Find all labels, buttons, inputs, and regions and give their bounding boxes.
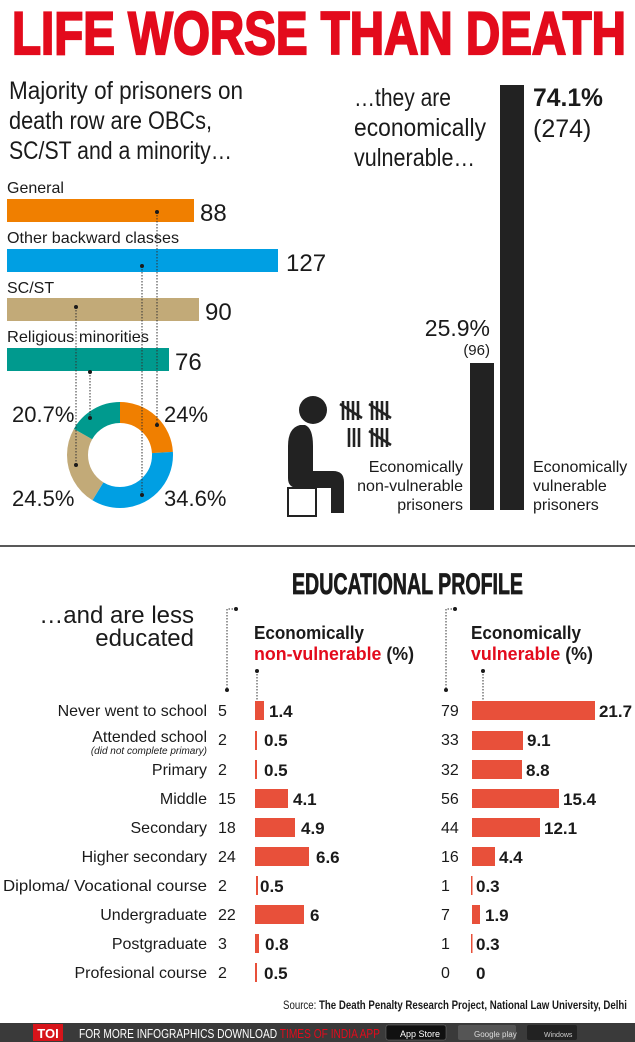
bar chart: vulnerable education: 21.7 [599,702,632,721]
row labels: Postgraduate [112,936,207,953]
bar chart: non-vulnerable education: 0.5 [264,964,288,983]
bar chart: economic vulnerability: vulnerable [533,478,607,495]
row labels: Diploma/ Vocational course [3,878,207,895]
bar chart: caste categories: 127 [286,250,326,277]
intro text: majority: death row are OBCs, [9,107,212,135]
bar chart: economic vulnerability: Economically [533,459,627,476]
bar chart: non-vulnerable education: 0.5 [260,877,284,896]
bar chart: non-vulnerable education: 5 [218,703,227,720]
bar chart: economic vulnerability: non-vulnerable [357,478,463,495]
donut chart: 20.7% [12,402,74,427]
bar chart: caste categories: 90 [205,299,232,326]
intro text: economically vulnerable [354,84,486,172]
bar chart: vulnerable education: 4.4 [499,848,523,867]
bar chart: caste categories: 76 [175,349,202,376]
bar chart: non-vulnerable education: 3 [218,936,227,953]
donut chart [12,402,226,511]
row labels: Middle [160,791,207,808]
column headings: Economically [471,623,581,643]
bar chart: non-vulnerable education: 6 [310,906,319,925]
bar chart: economic vulnerability: prisoners [397,497,463,514]
intro text: economically vulnerable: economically [354,114,486,142]
bar chart: non-vulnerable education: 22 [218,907,236,924]
bar chart: non-vulnerable education: 18 [218,820,236,837]
donut chart: 34.6% [164,486,226,511]
intro text: majority: Majority of prisoners on [9,77,243,105]
bar chart: vulnerable education: 0.3 [476,877,500,896]
bar chart: non-vulnerable education: 0.5 [264,761,288,780]
bar chart: vulnerable education: 0 [476,964,485,983]
bar chart: economic vulnerability: 25.9% [425,315,490,341]
bar chart: non-vulnerable education: 0.5 [264,731,288,750]
bar chart: economic vulnerability: prisoners [533,497,599,514]
bar chart: vulnerable education: 1.9 [485,906,509,925]
footer bar: Google play [474,1030,517,1039]
intro text: majority: SC/ST and a minority… [9,137,232,165]
column headings: vulnerable (%) [471,644,593,664]
column headings: non-vulnerable (%) [254,644,414,664]
bar chart: vulnerable education: 33 [441,732,459,749]
footer bar: Windows [544,1032,573,1039]
bar chart: caste categories: General [7,180,64,197]
bar chart: economic vulnerability: Economically [369,459,463,476]
bar chart: non-vulnerable education: 2 [218,878,227,895]
icon: tally marks [340,401,391,447]
bar chart: caste categories: 88 [200,200,227,227]
bar chart: vulnerable education: 16 [441,849,459,866]
intro text: majority [9,77,243,165]
bar chart: vulnerable education: 1 [441,936,450,953]
bar chart: non-vulnerable education [218,701,340,983]
column headings [254,623,593,664]
footer bar: FOR MORE INFOGRAPHICS DOWNLOAD TIMES OF INDIA APP [79,1026,380,1041]
row labels: Higher secondary [82,849,207,866]
bar chart: economic vulnerability: (274) [533,115,591,143]
bar chart: caste categories: Religious minorities [7,329,149,346]
bar chart: non-vulnerable education: 6.6 [316,848,340,867]
bar chart: non-vulnerable education: 4.9 [301,819,325,838]
bar chart: caste categories: SC/ST [7,280,54,297]
bar chart: vulnerable education: 1 [441,878,450,895]
bar chart: vulnerable education [441,701,632,983]
intro text: economically vulnerable: vulnerable… [354,144,475,172]
bar chart: vulnerable education: 15.4 [563,790,597,809]
bar chart: caste categories [7,180,326,376]
bar chart: economic vulnerability [357,84,627,514]
bar chart: vulnerable education: 32 [441,762,459,779]
bar chart: economic vulnerability: (96) [463,342,490,359]
bar chart: economic vulnerability: 74.1% [533,84,603,112]
text: less educated: educated [95,625,194,652]
connector dotted lines [74,210,159,497]
footer bar: TOI [37,1026,59,1041]
bar chart: vulnerable education: 79 [441,703,459,720]
donut chart: 24% [164,402,208,427]
row labels: (did not complete primary) [91,746,207,757]
bar chart: non-vulnerable education: 15 [218,791,236,808]
bar chart: non-vulnerable education: 2 [218,762,227,779]
bar chart: vulnerable education: 9.1 [527,731,551,750]
row labels: Profesional course [74,965,207,982]
bar chart: non-vulnerable education: 0.8 [265,935,289,954]
footer bar: App Store [400,1029,440,1039]
bar chart: vulnerable education: 8.8 [526,761,550,780]
bar chart: non-vulnerable education: 2 [218,732,227,749]
row labels: Never went to school [58,703,207,720]
bar chart: caste categories: Other backward classes [7,230,179,247]
bar chart: vulnerable education: 56 [441,791,459,808]
donut chart: 24.5% [12,486,74,511]
intro text: economically vulnerable: …they are [354,84,451,112]
icon: seated prisoner [288,396,344,516]
text: less educated [39,602,194,652]
bar chart: non-vulnerable education: 24 [218,849,236,866]
bar chart: non-vulnerable education: 2 [218,965,227,982]
text: less educated: …and are less [39,602,194,629]
footer bar [0,1023,635,1042]
bar chart: non-vulnerable education: 1.4 [269,702,293,721]
bar chart: vulnerable education: 7 [441,907,450,924]
bar chart: vulnerable education: 44 [441,820,459,837]
row labels [3,703,207,982]
bar chart: non-vulnerable education: 4.1 [293,790,317,809]
bar chart: vulnerable education: 0.3 [476,935,500,954]
bar chart: vulnerable education: 12.1 [544,819,577,838]
row labels: Undergraduate [100,907,207,924]
bar chart: vulnerable education: 0 [441,965,450,982]
connector brackets [225,607,485,709]
row labels: Attended school [92,729,207,746]
row labels: Primary [152,762,207,779]
column headings: Economically [254,623,364,643]
row labels: Secondary [130,820,207,837]
